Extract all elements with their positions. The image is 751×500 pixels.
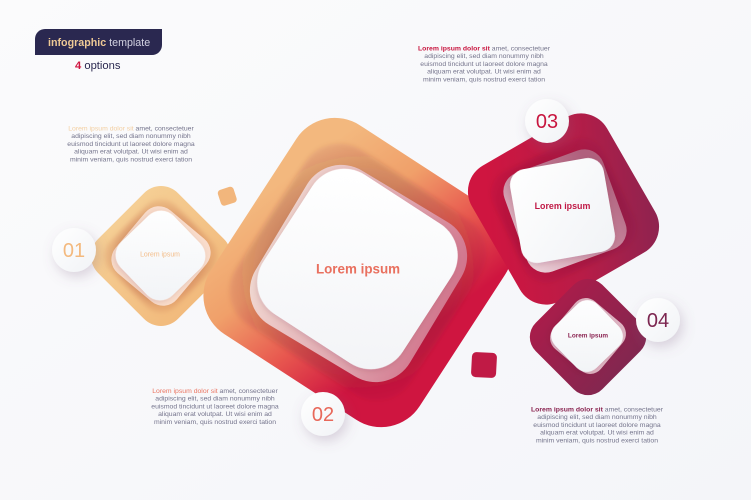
badge: 02: [301, 392, 345, 436]
option 3 outer shape: [457, 102, 670, 316]
option 2 white card: [243, 154, 472, 384]
subtitle: 4 options: 4 options: [75, 60, 121, 72]
option 2 back card: [235, 150, 482, 397]
text block: option 3: minim veniam, quis nostrud exerci tation: [423, 76, 545, 83]
title badge: infographic template: [48, 37, 150, 49]
panel: option 3: [457, 102, 670, 316]
text block: option 2: Lorem ipsum dolor sit amet, consectetuer: [152, 388, 278, 395]
text block: option 3: Lorem ipsum dolor sit amet, consectetuer: [418, 46, 551, 52]
text block: option 3: adipiscing elit, sed diam nonummy nibh: [424, 53, 544, 60]
badge: 01: 01: [63, 240, 85, 262]
text block: option 4: adipiscing elit, sed diam nonummy nibh: [537, 414, 657, 421]
text block: option 1: euismod tincidunt ut laoreet dolore magna: [67, 141, 195, 148]
text block: option 2: adipiscing elit, sed diam nonummy nibh: [155, 396, 275, 403]
option 1 back card: [104, 199, 218, 313]
panel: option 1: [81, 176, 241, 336]
badge: 03: 03: [536, 111, 558, 133]
text block: option 3: [418, 46, 551, 83]
option 4 white card: [545, 294, 629, 378]
option 4 outer diamond: [522, 271, 654, 403]
badge: 01: [52, 228, 96, 272]
option 1 label: Lorem ipsum: [140, 252, 180, 258]
text block: option 3: aliquam erat volutpat. Ut wisi enim ad: [427, 69, 541, 76]
badge: 04: [636, 298, 680, 342]
text block: option 1: minim veniam, quis nostrud exerci tation: [70, 156, 192, 163]
text block: option 4: minim veniam, quis nostrud exerci tation: [536, 437, 658, 444]
text block: option 1: Lorem ipsum dolor sit amet, consectetuer: [68, 126, 194, 132]
text block: option 2: [151, 388, 279, 426]
option 1 outer diamond: [81, 176, 241, 336]
option 4 back card: [544, 292, 632, 380]
option 3 white card: [507, 155, 618, 266]
badge: 04: 04: [647, 310, 669, 332]
text block: option 1: [67, 126, 195, 163]
option 3 back card: [498, 144, 632, 278]
text block: option 2: minim veniam, quis nostrud exerci tation: [154, 419, 276, 426]
text block: option 4: euismod tincidunt ut laoreet dolore magna: [533, 422, 661, 429]
text block: option 4: Lorem ipsum dolor sit amet, consectetuer: [531, 406, 664, 414]
option 2 label: Lorem ipsum: [316, 262, 400, 276]
option 1 inner shade: [96, 191, 226, 321]
option 1 white card: [108, 203, 213, 308]
badge: 03: [525, 99, 569, 143]
icon: small crimson square: [471, 352, 497, 378]
option 3 label: Lorem ipsum: [535, 201, 590, 211]
panel: option 2: [203, 118, 508, 428]
option 2 outer shape: [186, 100, 530, 445]
text block: option 4: [531, 406, 664, 444]
option 4 label: Lorem ipsum: [568, 332, 608, 340]
text block: option 1: adipiscing elit, sed diam nonummy nibh: [71, 133, 191, 140]
text block: option 4: aliquam erat volutpat. Ut wisi enim ad: [540, 430, 654, 437]
icon: small orange square: [217, 186, 238, 207]
text block: option 1: aliquam erat volutpat. Ut wisi enim ad: [74, 149, 188, 156]
option 3 inner shade: [483, 130, 644, 291]
badge: 02: 02: [312, 404, 334, 426]
text block: option 2: euismod tincidunt ut laoreet dolore magna: [151, 403, 279, 410]
text block: option 2: aliquam erat volutpat. Ut wisi enim ad: [158, 411, 272, 418]
panel: option 4: [522, 271, 654, 403]
option 2 inner shade: [230, 144, 484, 398]
text block: option 3: euismod tincidunt ut laoreet dolore magna: [420, 61, 548, 68]
header: [35, 29, 162, 72]
